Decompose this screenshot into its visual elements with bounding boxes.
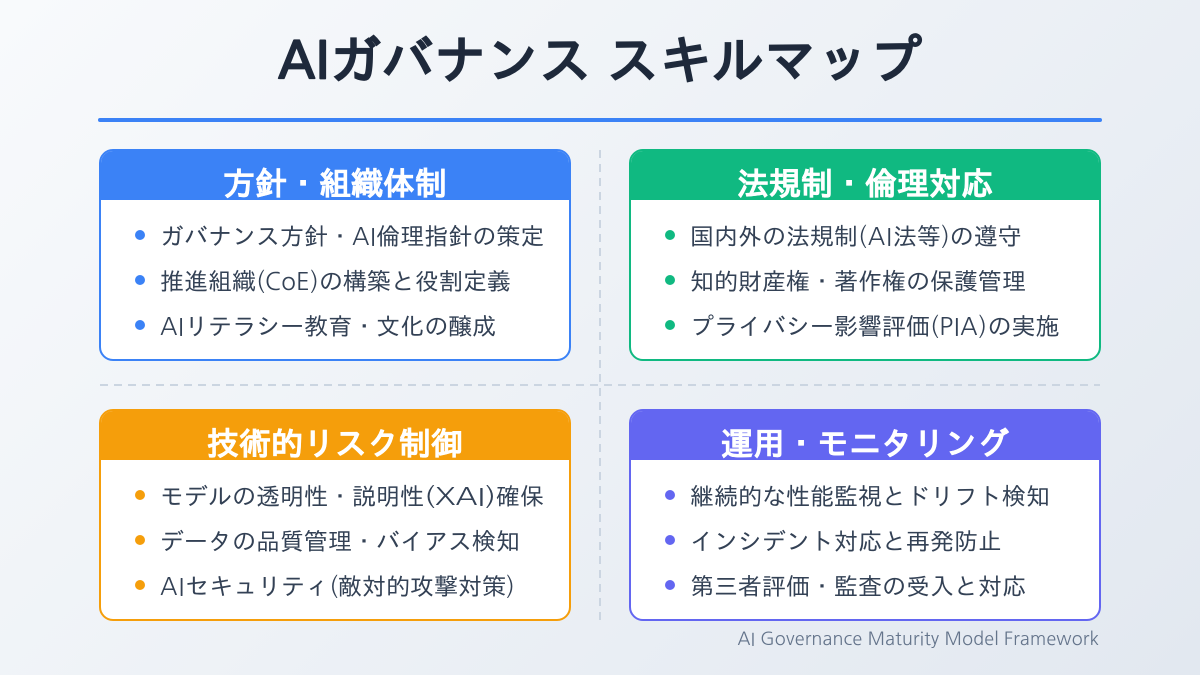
bullet — [135, 275, 145, 285]
bullet — [665, 275, 675, 285]
list item: 国内外の法規制(AI法等)の遵守 — [690, 225, 1022, 249]
list item: 推進組織(CoE)の構築と役割定義 — [160, 270, 511, 294]
panel: policy and organization — [99, 149, 571, 361]
list item: インシデント対応と再発防止 — [690, 530, 1002, 554]
bullet — [665, 535, 675, 545]
bullet — [665, 320, 675, 330]
panel: operations and monitoring — [629, 409, 1101, 621]
bullet — [665, 490, 675, 500]
list item: (XAI) — [424, 485, 496, 509]
list item: データの品質管理・バイアス検知 — [160, 530, 520, 554]
bullet — [135, 320, 145, 330]
list item: 知的財産権・著作権の保護管理 — [690, 270, 1026, 294]
list item: ガバナンス方針・AI倫理指針の策定 — [160, 225, 544, 249]
list item: 継続的な性能監視とドリフト検知 — [690, 485, 1050, 509]
footer caption: AI Governance Maturity Model Framework — [737, 630, 1099, 648]
bullet — [135, 230, 145, 240]
panel: technical risk control — [99, 409, 571, 621]
bullet — [665, 580, 675, 590]
panel heading: technical risk — [99, 409, 571, 460]
list item: プライバシー影響評価(PIA)の実施 — [690, 315, 1060, 339]
bullet — [135, 535, 145, 545]
panel: law and ethics — [629, 149, 1101, 361]
bullet — [665, 230, 675, 240]
title: AIガバナンス スキルマップ — [278, 35, 922, 87]
panel heading: technical risk: 技術的リスク制御 — [207, 428, 463, 460]
bullet — [135, 490, 145, 500]
panel heading: law — [629, 149, 1101, 200]
list item: AIリテラシー教育・文化の醸成 — [160, 315, 496, 339]
title underline — [98, 118, 1102, 122]
list item: AIセキュリティ(敵対的攻撃対策) — [160, 575, 515, 599]
panel heading: policy: 方針・組織体制 — [223, 168, 447, 200]
panel heading: law: 法規制・倫理対応 — [737, 168, 993, 200]
list item: 第三者評価・監査の受入と対応 — [690, 575, 1026, 599]
panel heading: policy — [99, 149, 571, 200]
bullet — [135, 580, 145, 590]
panel heading: operations — [629, 409, 1101, 460]
panel heading: operations: 運用・モニタリング — [721, 428, 1009, 460]
list item: モデルの透明性・説明性 確保 — [160, 485, 544, 509]
